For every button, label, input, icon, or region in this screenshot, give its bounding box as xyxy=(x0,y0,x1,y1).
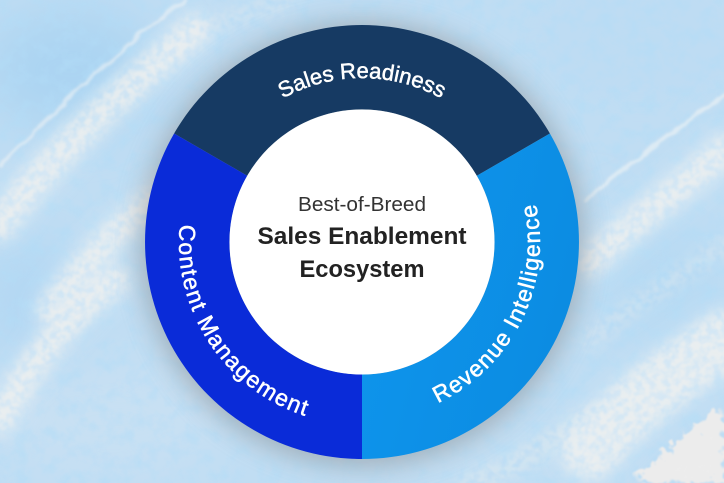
title line 1: Sales Enablement xyxy=(258,223,467,250)
center circle xyxy=(230,110,494,374)
center title xyxy=(258,194,467,283)
title line 2: Ecosystem xyxy=(300,256,424,283)
segment: Sales Readiness xyxy=(174,25,550,176)
label: Sales Readiness: Sales Readiness xyxy=(278,63,445,98)
subtitle: Best-of-Breed xyxy=(298,194,426,216)
ecosystem ring xyxy=(145,25,579,459)
segment: Revenue Intelligence xyxy=(362,134,579,459)
label: Content Management: Content Management xyxy=(178,226,309,416)
label: Revenue Intelligence: Revenue Intelligence xyxy=(432,205,544,403)
segment: Content Management xyxy=(145,134,362,459)
circle drop shadow xyxy=(140,22,584,466)
grey paper corner xyxy=(628,402,724,483)
thin brush lines xyxy=(0,0,724,200)
